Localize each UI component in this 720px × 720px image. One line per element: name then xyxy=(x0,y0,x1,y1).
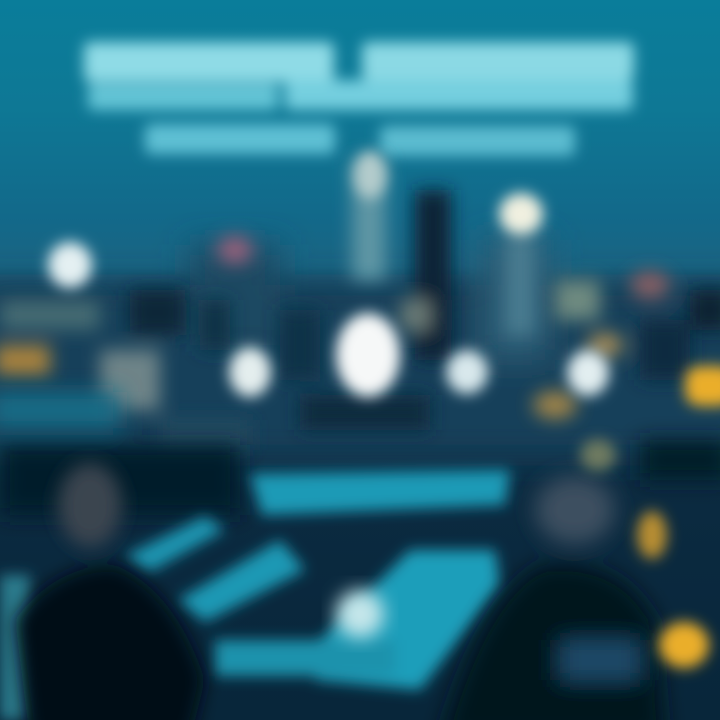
skyline: mottled buildings and towers xyxy=(0,160,720,450)
light: foreground reflection xyxy=(336,590,384,638)
figure: silhouette of person on right xyxy=(440,476,665,720)
title: blurred headline block xyxy=(84,42,634,156)
figure: silhouette of person on left xyxy=(15,463,205,720)
lights: amber accents xyxy=(580,439,709,668)
skyline: dark city band xyxy=(0,240,720,455)
lights: bright glowing windows xyxy=(48,151,720,406)
foreground: teal platforms xyxy=(0,470,510,720)
teal plaza band xyxy=(0,392,720,515)
